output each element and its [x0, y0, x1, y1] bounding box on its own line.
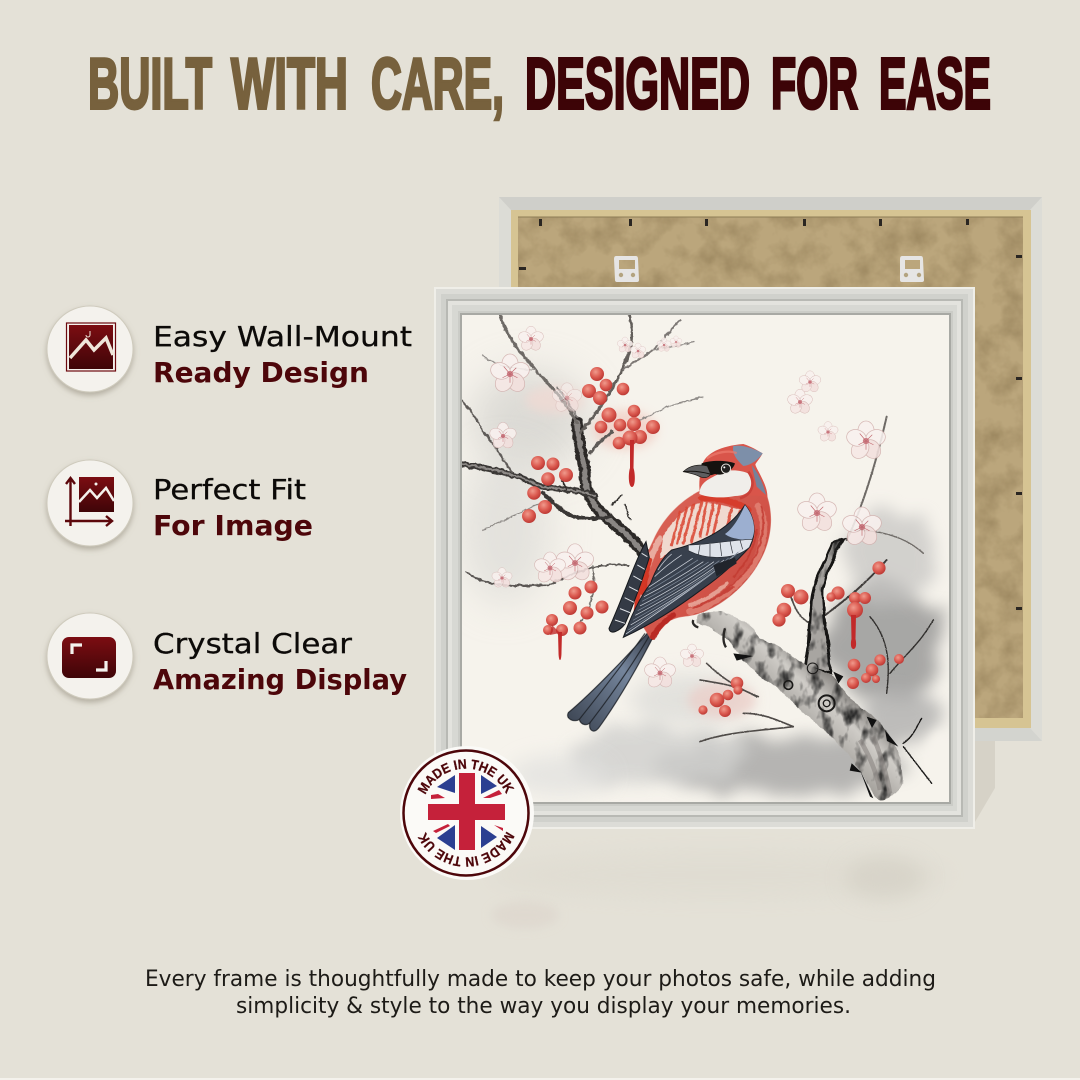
- plumage streaks: [636, 498, 763, 637]
- feature list: [47, 306, 412, 699]
- back of frame: [499, 197, 1042, 741]
- feature: easy wall-mount: [47, 306, 412, 392]
- left primaries: [609, 542, 649, 632]
- title: CARE,: [371, 44, 504, 124]
- title: DESIGNED: [525, 44, 750, 124]
- title: BUILT: [88, 44, 212, 124]
- feet: [693, 620, 726, 647]
- branches upper left: [460, 314, 703, 630]
- feature: easy wall-mount: Ready Design: [153, 356, 369, 389]
- hanging clips: [614, 256, 924, 282]
- head: [699, 444, 767, 498]
- icon: wall mount picture: [47, 306, 133, 392]
- staples: [519, 219, 1022, 610]
- branches and trunk lower right: [697, 417, 933, 800]
- badge text: MADE IN THE UK: [418, 832, 515, 867]
- footer text: [145, 967, 936, 1019]
- icon: image with dimension arrows: [47, 460, 133, 546]
- wing: [623, 505, 754, 637]
- footer text: simplicity & style to the way you display your memories.: [236, 994, 851, 1019]
- feature: perfect fit: [47, 460, 313, 546]
- title: EASE: [879, 44, 991, 124]
- blossoms: [488, 326, 888, 690]
- badge text: [417, 759, 515, 867]
- feature: easy wall-mount: Easy Wall-Mount: [153, 320, 412, 353]
- front frame: [434, 287, 975, 829]
- bird: [568, 444, 771, 731]
- union flag: [428, 773, 505, 850]
- feature: perfect fit: For Image: [153, 509, 313, 542]
- title: FOR: [771, 44, 858, 124]
- bottom edge: [0, 1078, 1080, 1080]
- artwork: bird on blossom branch: [460, 314, 954, 802]
- title: WITH: [231, 44, 348, 124]
- main trunk: [697, 540, 903, 800]
- feature: perfect fit: Perfect Fit: [153, 473, 306, 506]
- frame shadows: [490, 738, 995, 929]
- body: [634, 463, 771, 639]
- feature: crystal clear: [47, 613, 407, 699]
- feature: crystal clear: Crystal Clear: [153, 627, 353, 660]
- ink wash background: [460, 370, 954, 799]
- icon: screen with corners: [47, 613, 133, 699]
- title: [88, 44, 991, 124]
- fine twigs: [700, 417, 933, 783]
- footer text: Every frame is thoughtfully made to keep your photos safe, while adding: [145, 967, 936, 992]
- red paint drips: [550, 440, 856, 660]
- badge text: MADE IN THE UK: [417, 759, 514, 794]
- feature: crystal clear: Amazing Display: [153, 663, 407, 696]
- made in the uk badge: [400, 746, 534, 880]
- wing feathers: [626, 549, 742, 634]
- tail: [568, 625, 657, 731]
- red berries: [522, 367, 904, 717]
